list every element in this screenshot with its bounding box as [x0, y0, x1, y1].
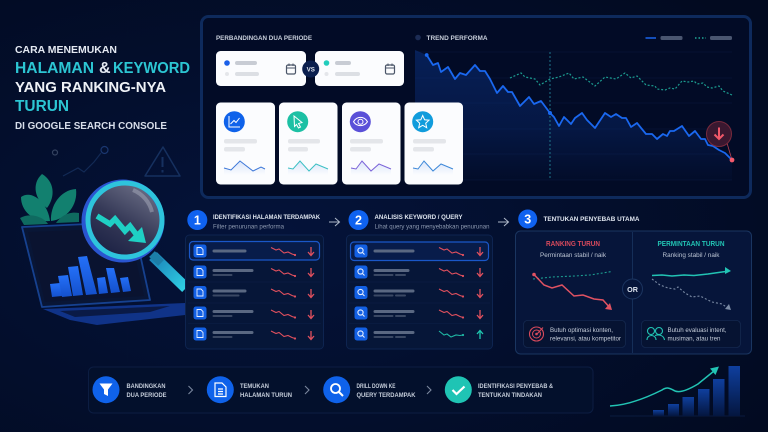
flow step: identifikasi: IDENTIFIKASI PENYEBAB &: [478, 383, 553, 390]
plant leaves: [20, 174, 79, 225]
legend: [646, 36, 732, 40]
step 3 heading: TENTUKAN PENYEBAB UTAMA: [544, 216, 640, 223]
row 2: [194, 266, 314, 278]
row 1: [354, 244, 483, 258]
magnifier trend arrow: [97, 216, 139, 238]
growth chart: [610, 366, 745, 416]
flow step: temukan: TEMUKAN: [240, 383, 269, 390]
metric card 4: [404, 102, 463, 184]
laptop bar chart: [50, 256, 131, 297]
chevron: [427, 386, 431, 394]
line chart: trend performa: [415, 50, 734, 180]
or badge: OR: [627, 285, 639, 294]
step 1 heading: [187, 210, 320, 230]
flow step: bandingkan: DUA PERIODE: [126, 392, 167, 399]
step 3 panel: [516, 231, 752, 354]
chevron: [188, 386, 192, 394]
title: CARA MENEMUKAN: [15, 44, 117, 56]
permintaan turun column: [642, 241, 740, 348]
title: TURUN: [15, 98, 69, 115]
flow step: drill down: QUERY TERDAMPAK: [356, 392, 416, 399]
flow step: drill down: DRILL DOWN KE: [356, 383, 396, 390]
comparison series: [510, 73, 732, 95]
row 3: [194, 286, 314, 299]
row 3: [354, 286, 483, 299]
metric card 2: [279, 102, 338, 184]
chevron: [305, 386, 309, 394]
row 4: [354, 306, 483, 320]
arrow: step 1 to step 2: [329, 218, 340, 226]
row 2: [354, 266, 483, 278]
step 2: analisis keyword / query: [346, 210, 492, 349]
row 4: [194, 306, 314, 320]
metric card 3: [342, 102, 400, 184]
heading: trend performa: TREND PERFORMA: [426, 35, 488, 42]
vs badge: VS: [307, 66, 315, 73]
recommendation: ranking turun: relevansi, atau kompetitor: [550, 336, 621, 342]
background decoration icons: [52, 146, 180, 176]
step 1 heading: IDENTIFIKASI HALAMAN TERDAMPAK: [213, 214, 320, 221]
ranking turun column: RANKING TURUN: [546, 241, 600, 248]
laptop screen: [22, 222, 150, 307]
step 1 list panel: [186, 235, 324, 349]
drop marker: [727, 143, 732, 160]
flow step: drill down: [323, 376, 416, 403]
step 1 heading: Filter penurunan performa: [213, 224, 284, 230]
row 5: [354, 328, 483, 340]
title: YANG RANKING-NYA: [15, 79, 166, 96]
recommendation: permintaan turun: [642, 320, 740, 348]
recommendation: permintaan turun: Butuh evaluasi intent,: [668, 327, 727, 334]
ranking turun column: [524, 241, 626, 348]
step 2 heading: [348, 210, 490, 230]
step 1 heading: 1: [194, 214, 201, 228]
step 2 heading: 2: [355, 214, 362, 228]
recommendation: ranking turun: [524, 320, 626, 348]
flow step: bandingkan: [92, 376, 167, 403]
flow step: temukan: HALAMAN TURUN: [240, 392, 292, 399]
magnifier handle: [153, 256, 186, 288]
title: HALAMAN: [15, 60, 94, 77]
step 2 heading: ANALISIS KEYWORD / QUERY: [374, 214, 463, 221]
permintaan turun column: PERMINTAAN TURUN: [658, 241, 724, 248]
flow step: identifikasi: [445, 376, 553, 403]
step 3 heading: 3: [524, 212, 531, 226]
metric card 1: [216, 102, 275, 184]
date card B: [315, 51, 404, 86]
row 5: [194, 328, 314, 340]
step 2 heading: Lihat query yang menyebabkan penurunan: [374, 224, 490, 230]
recommendation: ranking turun: Butuh optimasi konten,: [550, 327, 613, 334]
laptop base: [43, 303, 185, 325]
date card A: [216, 51, 306, 86]
illustration: laptop, plant and magnifying glass: [20, 174, 186, 325]
step 3: tentukan penyebab utama: [516, 210, 752, 354]
title: KEYWORD: [113, 60, 190, 77]
main series: [427, 55, 732, 160]
arrow: step 2 to step 3: [498, 218, 508, 226]
panel: dashboard: [202, 16, 750, 198]
permintaan turun column: Ranking stabil / naik: [662, 252, 720, 259]
title: DI GOOGLE SEARCH CONSOLE: [15, 120, 167, 132]
title: &: [99, 60, 111, 77]
ranking turun column: Permintaan stabil / naik: [540, 252, 607, 259]
step 3 heading: [518, 210, 640, 228]
summary flow bar: [88, 367, 593, 413]
magnifier lens: [84, 182, 162, 260]
row 1: [194, 244, 314, 258]
heading: perbandingan dua periode: PERBANDINGAN DUA PERIODE: [216, 35, 313, 42]
flow step: identifikasi: TENTUKAN TINDAKAN: [478, 392, 542, 399]
flow step: temukan: [207, 376, 292, 403]
step 1: identifikasi halaman terdampak: [186, 210, 324, 349]
recommendation: permintaan turun: musiman, atau tren: [668, 336, 721, 342]
title: [15, 44, 190, 132]
vs badge: [302, 60, 319, 78]
or badge: [622, 279, 642, 299]
flow step: bandingkan: BANDINGKAN: [126, 383, 166, 390]
step 2 list panel: [346, 235, 492, 349]
